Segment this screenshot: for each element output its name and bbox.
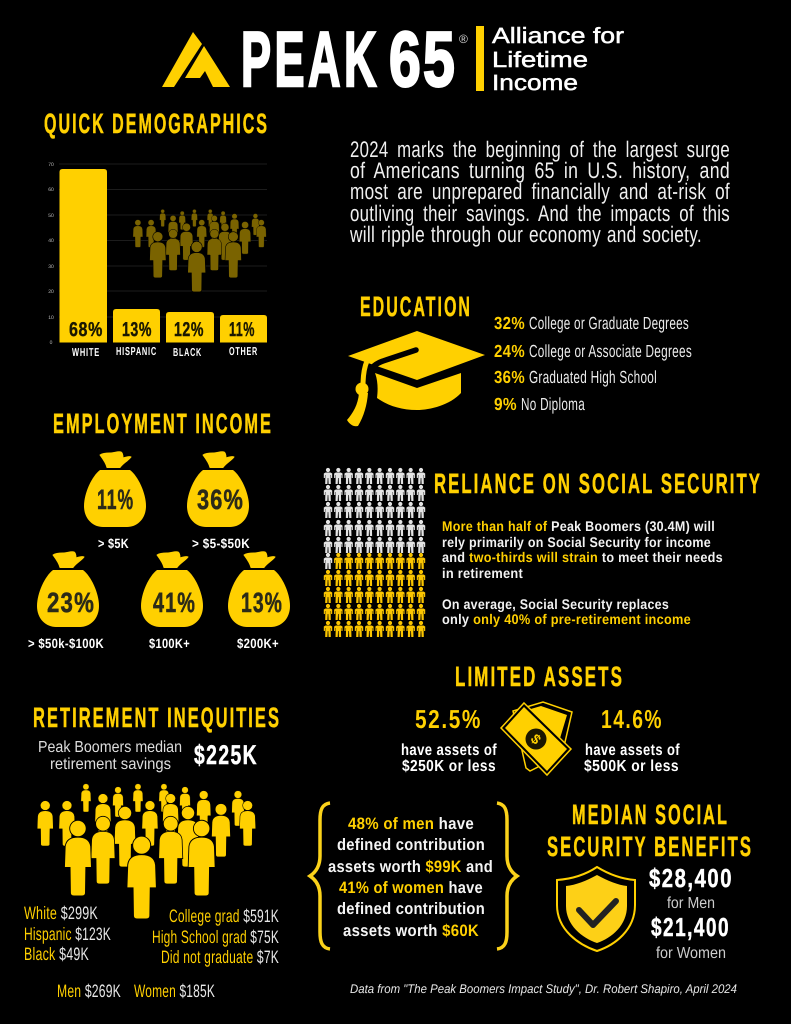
wordmark: 65 bbox=[389, 15, 457, 103]
bar chart: 11% bbox=[229, 319, 255, 341]
icon: peak mountain bbox=[162, 32, 230, 87]
money bag 41%: $100K+ bbox=[149, 636, 190, 651]
bar chart: 68% bbox=[69, 319, 103, 341]
heading: RETIREMENT INEQUITIES bbox=[33, 702, 281, 733]
panel: retirement inequities bbox=[24, 702, 281, 1001]
bar chart: OTHER bbox=[229, 346, 258, 358]
education savings: College grad $591K bbox=[169, 906, 279, 926]
median savings label: Peak Boomers median bbox=[38, 739, 182, 756]
stat 52.5% bbox=[401, 704, 497, 775]
women benefit bbox=[651, 912, 730, 962]
panel: reliance on social security bbox=[324, 468, 762, 637]
bar chart: WHITE bbox=[72, 347, 100, 359]
bar chart: 12% bbox=[174, 319, 204, 341]
money bag 13% bbox=[228, 552, 290, 651]
education stats: College or Associate Degrees bbox=[529, 341, 692, 361]
registered mark: ® bbox=[459, 32, 468, 46]
reliance text: in retirement bbox=[442, 565, 523, 581]
money bag 23%: > $50k-$100K bbox=[28, 636, 104, 651]
race savings: White $299K bbox=[24, 903, 98, 923]
women benefit: $21,400 bbox=[651, 912, 730, 942]
bar chart: BLACK bbox=[173, 347, 202, 359]
stat 52.5%: have assets of bbox=[401, 742, 497, 759]
education stats: 9% bbox=[494, 394, 517, 414]
reliance text: only only 40% of pre-retirement income bbox=[442, 611, 691, 627]
icon: shield with check bbox=[557, 867, 635, 951]
reliance text: More than half of Peak Boomers (30.4M) will bbox=[442, 518, 715, 534]
education stats: No Diploma bbox=[521, 394, 585, 414]
stat 14.6%: 14.6% bbox=[601, 704, 663, 734]
callout text bbox=[328, 815, 493, 940]
education savings bbox=[152, 906, 279, 967]
money bag 13%: 13% bbox=[241, 587, 283, 618]
men benefit: for Men bbox=[667, 895, 715, 912]
heading bbox=[547, 799, 753, 862]
heading: EDUCATION bbox=[360, 291, 472, 322]
money bag 13%: $200K+ bbox=[237, 636, 279, 651]
median savings label: retirement savings bbox=[50, 756, 171, 773]
icon: crowd of people bbox=[37, 784, 256, 919]
money bag 11% bbox=[84, 452, 146, 551]
bar chart bbox=[48, 162, 267, 359]
icon: cash bills bbox=[501, 702, 572, 775]
callout text: 48% of men have bbox=[348, 815, 474, 833]
women benefit: for Women bbox=[656, 945, 726, 962]
people waffle chart bbox=[324, 468, 425, 637]
tagline: Alliance for bbox=[492, 23, 624, 48]
tagline bbox=[492, 23, 624, 95]
race savings bbox=[24, 903, 111, 964]
stat 14.6%: have assets of bbox=[585, 742, 680, 759]
money bag 36%: > $5-$50K bbox=[192, 536, 250, 551]
reliance text bbox=[442, 518, 723, 627]
icon: cash bills: $ bbox=[528, 731, 545, 748]
education stats bbox=[494, 313, 692, 414]
race savings: Black $49K bbox=[24, 944, 89, 964]
panel: education bbox=[347, 291, 692, 426]
men benefit: $28,400 bbox=[649, 863, 733, 893]
heading: EMPLOYMENT INCOME bbox=[53, 408, 273, 439]
money bag 11%: > $5K bbox=[98, 536, 129, 551]
panel: limited assets bbox=[401, 661, 680, 775]
stat 52.5%: $250K or less bbox=[402, 758, 496, 775]
education savings: High School grad $75K bbox=[152, 927, 279, 947]
reliance text: and two-thirds will strain to meet their needs bbox=[442, 549, 723, 565]
crowd icon behind bars bbox=[133, 209, 266, 292]
education stats: 32% bbox=[494, 313, 525, 333]
callout text: 41% of women have bbox=[339, 879, 483, 897]
bar chart: 30 bbox=[48, 264, 54, 270]
source footnote: Data from "The Peak Boomers Impact Study", Dr. Robert Shapiro, April 2024 bbox=[350, 982, 737, 996]
stat 14.6%: $500K or less bbox=[584, 758, 679, 775]
tagline: Lifetime bbox=[492, 47, 588, 72]
right brace bbox=[497, 803, 517, 949]
bar chart: 0 bbox=[50, 340, 53, 346]
panel: defined contribution callout bbox=[310, 803, 517, 949]
money bag 41% bbox=[141, 552, 203, 651]
callout text: defined contribution bbox=[337, 836, 485, 854]
money bag 23%: 23% bbox=[47, 587, 95, 618]
education savings: Did not graduate $7K bbox=[161, 947, 279, 967]
header logo bbox=[162, 15, 624, 103]
bar chart: 20 bbox=[48, 289, 54, 295]
education stats: 36% bbox=[494, 367, 525, 387]
panel: employment income bbox=[28, 408, 290, 651]
money bag 36%: 36% bbox=[197, 484, 244, 515]
stat 14.6% bbox=[584, 704, 680, 775]
callout text: assets worth $60K bbox=[343, 922, 479, 940]
education stats: College or Graduate Degrees bbox=[529, 313, 689, 333]
stat 52.5%: 52.5% bbox=[415, 704, 482, 734]
tagline: Income bbox=[492, 70, 578, 95]
reliance text: On average, Social Security replaces bbox=[442, 596, 669, 612]
panel: median social security benefits bbox=[547, 799, 753, 962]
education stats: Graduated High School bbox=[529, 367, 657, 387]
gender savings: Women $185K bbox=[134, 981, 215, 1001]
race savings: Hispanic $123K bbox=[24, 924, 111, 944]
callout text: defined contribution bbox=[337, 900, 485, 918]
bar chart: 70 bbox=[48, 162, 54, 168]
panel: quick demographics bbox=[44, 108, 269, 359]
icon: graduation cap bbox=[347, 331, 485, 426]
money bag 11%: 11% bbox=[97, 484, 134, 515]
left brace bbox=[310, 803, 330, 949]
money bag 41%: 41% bbox=[153, 587, 196, 618]
gender savings: Men $269K bbox=[57, 981, 121, 1001]
education stats: 24% bbox=[494, 341, 525, 361]
gender savings bbox=[57, 981, 215, 1001]
bar chart: HISPANIC bbox=[116, 346, 157, 358]
bar chart: 13% bbox=[122, 319, 152, 341]
bar chart: 10 bbox=[48, 315, 54, 321]
median savings value: $225K bbox=[194, 740, 258, 770]
money bag 23% bbox=[28, 552, 104, 651]
wordmark: PEAK bbox=[241, 15, 380, 103]
heading: LIMITED ASSETS bbox=[455, 661, 624, 692]
money bag 36% bbox=[187, 452, 250, 551]
bar chart: 50 bbox=[48, 213, 54, 219]
intro paragraph bbox=[349, 137, 730, 247]
bar chart: 60 bbox=[48, 187, 54, 193]
heading: QUICK DEMOGRAPHICS bbox=[44, 108, 269, 139]
callout text: assets worth $99K and bbox=[328, 858, 493, 876]
median savings label bbox=[38, 739, 182, 773]
reliance text: rely primarily on Social Security for income bbox=[442, 534, 711, 550]
bar chart: 40 bbox=[48, 238, 54, 244]
men benefit bbox=[649, 863, 733, 912]
